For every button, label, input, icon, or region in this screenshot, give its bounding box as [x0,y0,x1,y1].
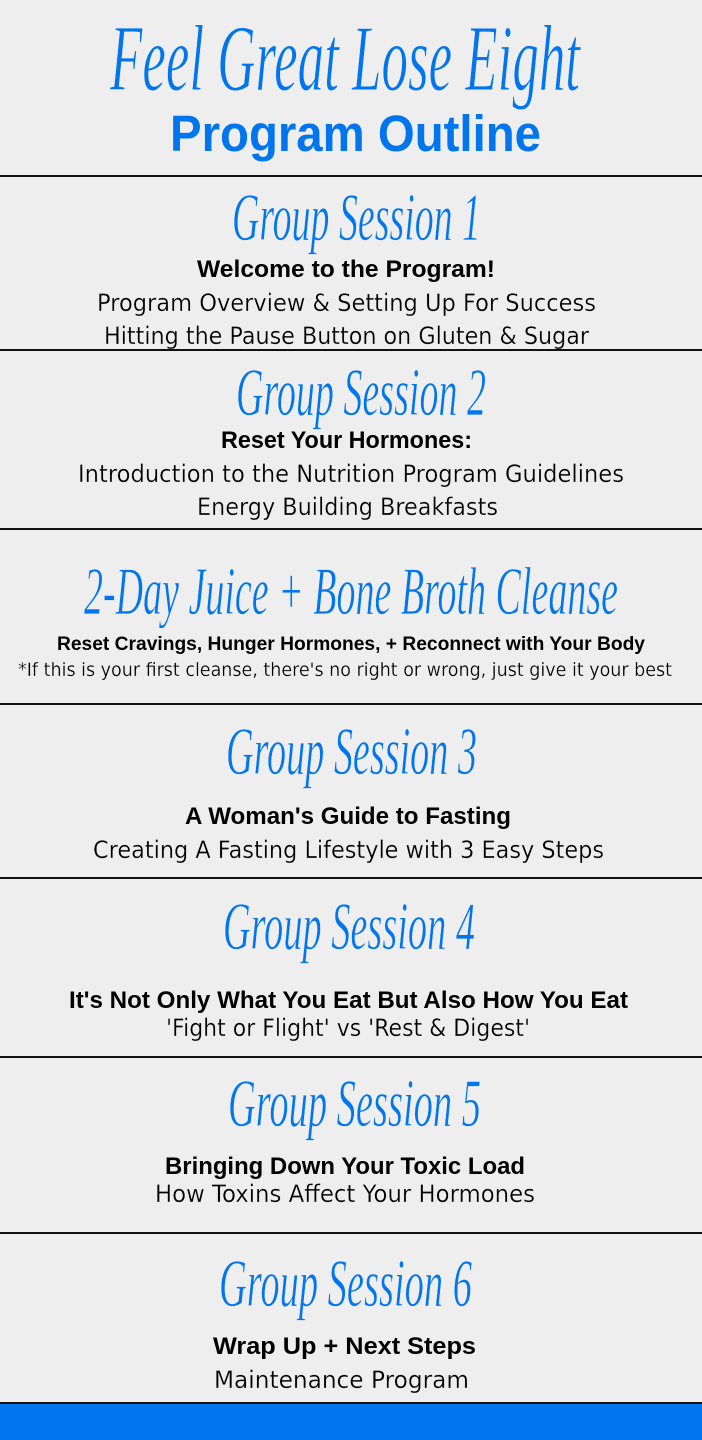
panel: group session 2: Introduction to the Nutrition Program Guidelines [78,460,624,488]
panel: group session 4: Group Session 4 [223,888,475,964]
panel: group session 2: Group Session 2 [236,354,486,430]
panel: group session 4: 'Fight or Flight' vs 'Rest & Digest' [166,1014,530,1042]
panel: group session 3: Group Session 3 [226,713,477,789]
footer bar [0,1402,702,1440]
panel: group session 5: Group Session 5 [228,1065,481,1141]
panel: group session 4 [69,888,628,1042]
panel: 2-day cleanse [18,553,672,681]
panel: group session 6 [213,1245,476,1394]
panel: group session 2 [78,354,624,521]
panel: group session 3: A Woman's Guide to Fasting [185,803,511,830]
panel: group session 3 [93,713,604,864]
panel: group session 1: Hitting the Pause Button on Gluten & Sugar [104,322,589,350]
panel: group session 6: Wrap Up + Next Steps [213,1333,476,1360]
panel: group session 2: Reset Your Hormones: [221,427,472,454]
panel: group session 1 [97,179,596,350]
panel: group session 1: Program Overview & Setting Up For Success [97,289,596,317]
panel: group session 5: Bringing Down Your Toxic Load [165,1153,525,1180]
panel: 2-day cleanse: Reset Cravings, Hunger Hormones, + Reconnect with Your Body [57,634,645,655]
panel: group session 1: Welcome to the Program! [197,256,495,283]
title [109,7,581,162]
panel: group session 4: It's Not Only What You Eat But Also How You Eat [69,987,628,1014]
panel: group session 5: How Toxins Affect Your Hormones [155,1180,535,1208]
panel: group session 1: Group Session 1 [232,179,481,255]
panel: group session 5 [155,1065,535,1208]
panel: group session 6: Maintenance Program [214,1366,469,1394]
panel: group session 3: Creating A Fasting Lifestyle with 3 Easy Steps [93,836,604,864]
panel: group session 6: Group Session 6 [219,1245,472,1321]
panel: group session 2: Energy Building Breakfasts [197,493,498,521]
title: Program Outline [170,105,541,162]
